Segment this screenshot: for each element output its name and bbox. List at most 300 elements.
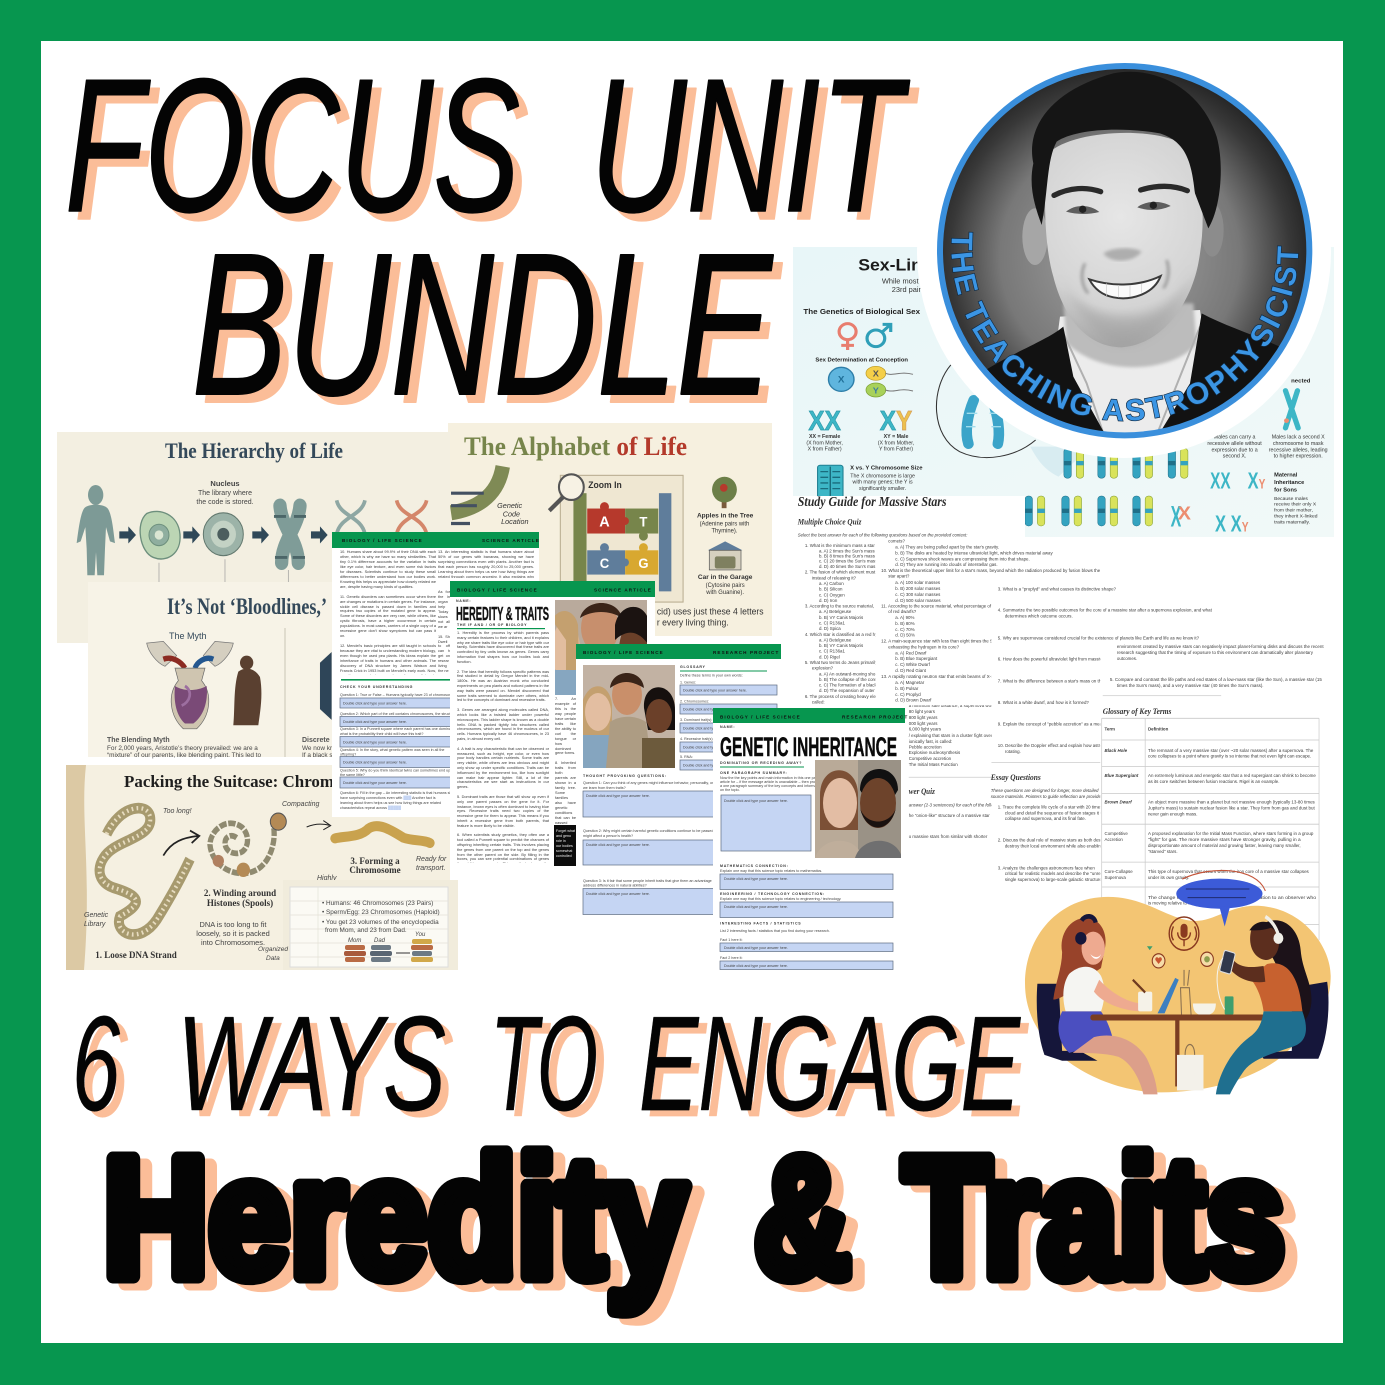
question 3: Question 3: In a Punnett square where each parent has one dominant [340, 727, 454, 731]
quiz column 2: 11. According to the source material, what percentage of stars [881, 603, 1002, 608]
male inheritance captions: Males can carry a [1214, 435, 1256, 441]
chairs [1037, 982, 1329, 1061]
question 2: Double click and type your answer here. [586, 843, 650, 847]
chromosome size note: with many genes; the Y is [853, 480, 913, 486]
step labels: 1. Loose DNA Strand [95, 950, 177, 960]
quiz column 3: These questions are designed for longer, more detailed [991, 788, 1099, 793]
glossary block: 5. RNA: [680, 755, 693, 759]
glossary table: This type of supernova that occurs when the iron core of a massive star collapses [1148, 869, 1309, 874]
interesting facts: INTERESTING FACTS / STATISTICS [720, 922, 801, 926]
male inheritance captions: recessive allele without [1207, 441, 1262, 447]
side column text: 7. An example of this is the way people have certain traits like the ability to curl the tongue or how dominant gene forms. [555, 697, 576, 755]
puzzle: A: A [599, 514, 610, 530]
step labels [95, 856, 401, 960]
fact list [322, 900, 440, 934]
glossary block: GLOSSARY [680, 665, 706, 669]
quiz column 2: d. D) 50% [895, 632, 915, 638]
quiz column 2 top: a. A) They are being pulled apart by the star's gravity. [895, 544, 999, 550]
engineering connection: Double click and type your answer here. [724, 905, 788, 909]
quiz column 1: explosion? [812, 666, 833, 671]
question 5: the same little? [340, 773, 365, 777]
topic: heredity and traits: Heredity [103, 1123, 687, 1313]
question 1: Question 1: True or False – Humans typically have 23 of chromosomes in each cell. [340, 693, 477, 697]
quiz column 2: d. D) Brown Dwarf [895, 698, 932, 703]
essay page upper text: research suggesting that the timing of exposure to this environment can dramatically alter planetary [1117, 650, 1314, 655]
quiz column 3: destroy their local environment while also enabling [1005, 843, 1104, 849]
glossary table: A proposed explanation for the Initial Mass Function, where stars forming in a group [1148, 831, 1314, 836]
discrete caption: Discrete I [302, 737, 334, 744]
XX female: XX [808, 406, 841, 437]
portrait badge [937, 63, 1312, 438]
glossary table: is moving relative to the source. [1148, 901, 1210, 906]
icon: book stacks [344, 939, 433, 962]
quiz column 1: instead of releasing it? [812, 575, 856, 580]
title shadow: focus unit: UNIT [599, 48, 919, 260]
glossary table: The change in wavelength of light or sound in relation to an observer who [1148, 895, 1317, 900]
question 3: Double click and type your answer here. [586, 892, 650, 896]
article columns: 11. Genetic disorders can sometimes occur when there are changes or mutations in certain genes. For instance, sickle cell disease is passed down in families and requires two copies of the mutated gene to appear. Some of these disorders are very rare, while others, like cystic fibrosis, have a higher occurrence in certain populations. In most cases, carriers of a single copy of a recessive gene don't show symptoms but can pass it on. [340, 595, 436, 638]
quiz column 3: 10. Describe the Doppler effect and explain how astronomers [998, 743, 1118, 748]
header labels [457, 588, 652, 592]
hierarchy title: The Hierarchy of Life [165, 438, 343, 463]
quiz column 1: d. D) The expansion of outer layers [819, 688, 888, 693]
quiz column 2: 13. A rapidly rotating neutron star that emits beams of X-rays [881, 674, 1000, 679]
quiz column 2 lower: Pebble accretion [909, 744, 942, 749]
icon: red DNA helix [397, 500, 427, 534]
question 2 [583, 829, 723, 865]
engineering connection: ENGINEERING / TECHNOLOGY CONNECTION: [720, 892, 825, 896]
topic shadow: heredity and traits [115, 1130, 1297, 1320]
quiz column 1: b. B) VY Canis Majoris [819, 643, 864, 648]
article right column cut-off [438, 590, 450, 680]
quiz column 2 lower: o massive stars from similar with shorter [909, 834, 988, 839]
callout: black box: role in [556, 839, 566, 843]
study guide title: Study Guide for Massive Stars [798, 494, 947, 509]
question 3: Double click and type your answer here. [343, 740, 407, 744]
question 3 [583, 879, 723, 914]
question 1: Double click and type your answer here. [343, 702, 407, 706]
glossary table: Jupiter's mass) to sustain nuclear fusion like a star. They form from gas and dust but [1148, 805, 1315, 811]
article text [457, 631, 549, 863]
glossary block: Define these terms in your own words: [680, 674, 743, 678]
header labels: BIOLOGY / LIFE SCIENCE [342, 538, 423, 543]
panel: packing the suitcase [66, 765, 458, 970]
genetic code label: Code [503, 509, 520, 518]
question 2: Question 2: Which part of the cell contains chromosomes, the structures? [340, 712, 460, 716]
subtitle shadow: 6 ways to engage: TO [498, 994, 606, 1145]
quiz column 1: 6. The process of creating heavy elements is [805, 694, 893, 699]
glossary table: Definition [1148, 726, 1168, 732]
photo: two students [815, 760, 902, 858]
glossary table: never gain enough mass. [1148, 811, 1197, 817]
poster title: Sex-Lin [858, 255, 922, 275]
glossary table: "fight" for gas. The more massive stars have stronger gravity, pulling in a [1148, 837, 1301, 842]
title: focus unit: UNIT [590, 40, 910, 252]
article right column cut-off: As for the in organ help Today slows not all we ar [438, 590, 450, 629]
quiz column 1: a. A) An outward-moving shockwave [819, 671, 890, 677]
interesting facts: List 2 interesting facts / statistics that you find during your research. [720, 929, 830, 933]
quiz column 1: a. A) Carbon [819, 581, 844, 586]
quiz column 1: called: [812, 699, 825, 705]
quiz column 1: c. C) R136a1 [819, 649, 845, 654]
quiz column 2: of red dwarfs? [888, 609, 917, 614]
myth caption: “mixture” of our parents, like blending paint. This led to [107, 752, 261, 759]
quiz column 3: 1. Trace the complete life cycle of a star with 20 times [998, 804, 1103, 809]
icon: garage [708, 541, 742, 570]
XY male: XY = Male [884, 434, 909, 440]
title shadow: focus unit: FOCUS [74, 48, 529, 260]
engineering connection: Explain one way that this science topic relates to engineering / technology. [720, 897, 841, 901]
XX female: X from Father) [808, 447, 842, 453]
interesting facts: Double click and type your answer here. [724, 946, 788, 950]
divider [284, 628, 286, 757]
question 5: Double click and type your answer here. [343, 781, 407, 785]
arrow [163, 831, 199, 856]
genetic code label: Location [501, 517, 528, 526]
subtitle shadow: 6 ways to engage: WAYS [185, 994, 454, 1145]
handwritten notes: Ready for [416, 856, 447, 863]
document: science article page [332, 532, 540, 817]
question 1: Question 1: Can you think of any genes might influence behavior, personality, or [583, 781, 714, 785]
portrait: shirt and neck [1058, 302, 1201, 432]
quiz column 2: a. A) Magnetar [895, 680, 925, 685]
question 6: Question 6: Fill in the gap – An interesting statistic is that humans share [340, 791, 457, 795]
myth caption: For 2,000 years, Aristotle’s theory prevailed: we are a [107, 745, 258, 752]
XY male: (X from Mother, [878, 440, 914, 446]
small X and x chromosomes: X [1178, 504, 1191, 524]
topic: heredity and traits [103, 1123, 1285, 1313]
question 3: what is the probability their child will have this trait? [340, 732, 423, 736]
portrait: face [1045, 133, 1203, 347]
thought provoking heading: THOUGHT PROVOKING QUESTIONS: [583, 774, 667, 778]
icon: magnifying glass [549, 474, 584, 511]
title: focus unit: FOCUS [65, 40, 520, 252]
name field: NAME: [720, 725, 735, 729]
document: genetic inheritance page [713, 708, 908, 972]
topic shadow: heredity and traits: Traits [915, 1130, 1297, 1320]
title: bundle: BUNDLE [192, 211, 774, 437]
subtitle: 6 ways to engage: TO [490, 988, 598, 1139]
organized data note: Organized [258, 946, 288, 953]
step labels: Histones (Spools) [207, 898, 273, 908]
icon: egg cell [829, 367, 854, 391]
alphabet title: The Alphabet of Life [464, 432, 687, 461]
callout: black box: Forget what [556, 829, 575, 833]
glossary table: Blue Supergiant [1105, 773, 1139, 778]
maternal inheritance [1210, 468, 1318, 536]
question 5: Question 5: Why do you think identical twins can sometimes end up looking [340, 768, 463, 772]
green header [713, 708, 905, 723]
question 3: address differences in natural abilities? [583, 884, 647, 888]
quiz column 2: 12. A main-sequence star with less than eight times the Sun's mass [881, 638, 1013, 644]
XX female: (X from Mother, [806, 440, 843, 446]
quiz column 2 lower: / explaining that stars in a cluster fight over [909, 733, 993, 738]
quiz column 3: collapse and supernova, and its final fate. [1005, 816, 1086, 821]
mom dad you [348, 932, 426, 944]
mom dad you: Mom [348, 938, 361, 944]
dark hexagon [320, 652, 332, 720]
quiz column 1: c. C) The formation of a black hole [819, 682, 887, 688]
the myth label: The Myth [169, 631, 207, 641]
essay page upper text: environment created by massive stars can negatively impact planet-forming disks and discuss the recent [1117, 644, 1324, 649]
apples caption: Thymine). [711, 528, 738, 534]
puzzle: A [587, 502, 625, 534]
green rule [720, 766, 804, 768]
organized data note [258, 946, 288, 962]
glossary table [1102, 718, 1319, 940]
quiz column 3: source materials. Pointers to guide reflection are provided [991, 794, 1104, 799]
quiz column 1: b. B) VY Canis Majoris [819, 615, 864, 620]
fact list: • You get 23 volumes of the encyclopedia [322, 919, 439, 926]
glossary block: Double click and type your answer here. [683, 746, 747, 750]
panel: the hierarchy of life [57, 432, 450, 643]
interesting facts [720, 922, 893, 970]
quiz column 3 top: 3. What is a "proplyd" and what causes its distinctive shape? [998, 586, 1116, 591]
quiz column 3 top [998, 586, 1212, 640]
math connection: Explain one way that this science topic relates to mathematics. [720, 869, 822, 873]
question 2: Double click and type your answer here. [343, 720, 407, 724]
glossary block: Double click and type your answer here. [683, 688, 747, 692]
quiz column 1: d. D) Iron [819, 598, 838, 603]
quiz column 2: b. B) 200 solar masses [895, 586, 941, 591]
handwritten notes: Highly [317, 875, 337, 882]
quiz column 2 lower: a minimum safe distance, a supernova would [909, 703, 997, 708]
quiz column 2: a. A) 90% [895, 615, 914, 620]
dna note: loosely, so it is packed [196, 929, 270, 938]
math connection: Double click and type your answer here. [724, 877, 788, 881]
quiz column 2 lower: Competitive accretion [909, 756, 951, 761]
panel: sex-linked inheritance poster [793, 247, 1334, 537]
interesting facts: Fact 2 here it: [720, 956, 743, 960]
bowl and cup [1193, 996, 1234, 1015]
portrait: eyebrows [1054, 186, 1187, 195]
header labels: BIOLOGY / LIFE SCIENCE [457, 588, 538, 592]
quiz column 2: a. A) 100 solar masses [895, 580, 941, 585]
yellow blob [1025, 897, 1331, 1092]
quiz column 2 lower: 800 light years [909, 715, 938, 720]
icon: smile bubble [1201, 952, 1213, 966]
maternal inheritance: XY [1248, 468, 1266, 493]
question 6: learning about them helps us see how living things are related [340, 801, 441, 805]
quiz column 2 lower: The Initial Mass Function [909, 762, 958, 767]
quiz column 3: Essay Questions [990, 773, 1041, 782]
quiz column 2 lower: 000 light years [909, 721, 938, 726]
portrait: nose shadow [1103, 248, 1142, 261]
callout: black box: somewhat [556, 849, 572, 853]
handwritten notes: Too long! [163, 808, 192, 815]
discrete caption: If a black s [302, 752, 333, 759]
glossary table: Accretion [1105, 837, 1123, 842]
question 6: characteristics repeat across █████ [340, 805, 401, 811]
interesting facts: Fact 1 here it: [720, 938, 743, 942]
large X chromosome [1284, 391, 1298, 428]
maternal inheritance: from their mother, [1274, 507, 1313, 513]
male inheritance captions: chromosome to mask [1273, 441, 1324, 447]
article text: 1. Heredity is the process by which parents pass many certain features to their children, and it explains why we share traits like eye color or hair type with our family. Scientists have discovered that these traits are controlled by tiny units known as genes. Genes carry information that shapes how our bodies look and function. [457, 631, 549, 664]
quiz column 2: c. C) 300 solar masses [895, 592, 941, 597]
mom dad you: You [415, 932, 426, 938]
quiz column 2 lower: 6,000 light years [909, 726, 942, 732]
white tote bag [1177, 1044, 1203, 1090]
portrait: eyes [1066, 202, 1171, 214]
quiz column 2 lower: 80 light years [909, 709, 936, 714]
green rule [341, 679, 451, 681]
article text: 3. Genes are arranged along molecules called DNA, which looks like a twisted ladder under powerful microscopes. This ladder shape is known as a double helix. DNA is packed tightly into structures called chromosomes, which are found in the nucleus of our cells. Humans typically have 46 chromosomes, in 23 pairs, in almost every cell. [457, 708, 549, 741]
summary block: on the topic. [720, 788, 740, 792]
article columns: 10. Humans share about 99.9% of their DNA with each other, which is why we have so many similarities. That tiny 0.1% difference accounts for the variation in traits like eye color, hair texture, and even some risk factors for diseases. Scientists continue to study these small differences to better understand how our bodies work. Knowing this helps us appreciate how closely related we are, despite having many kinds of qualities. [340, 550, 436, 589]
question 3: Question 3: Is it fair that some people inherit traits that give them an advantage [583, 879, 712, 883]
genetic code label [498, 502, 528, 524]
topic: heredity and traits: & [754, 1123, 851, 1313]
curved badge text: THE TEACHING ASTROPHYSICIST [950, 232, 1299, 422]
male inheritance captions: nected [1291, 379, 1311, 385]
icon: Aristotle figure [233, 656, 261, 725]
glossary block: 4. Recessive trait(s): [680, 737, 714, 741]
icon: sperm cells: Y [873, 386, 879, 395]
header labels [342, 538, 540, 543]
question 1 [340, 693, 477, 708]
portrait: smile [1089, 276, 1161, 298]
quiz column 1: d. D) Spica [819, 626, 841, 631]
XX female: XX = Female [809, 434, 840, 440]
essay page upper text: outcomes. [1117, 656, 1137, 661]
apples caption: Apples in the Tree [697, 512, 754, 519]
quiz column 1 [805, 544, 876, 704]
quiz column 2: c. C) Proplyd [895, 692, 921, 697]
handwritten notes: transport. [416, 865, 446, 872]
quiz column 3: 6. How does the powerful ultraviolet light from massive stars [998, 656, 1116, 662]
step labels: 3. Forming a [350, 856, 400, 866]
question 5 [340, 768, 463, 788]
quiz column 2 top: comets? [888, 538, 905, 544]
icon: mars symbol [867, 324, 891, 347]
question 1 [583, 781, 723, 817]
speech bubble [1176, 870, 1265, 926]
quiz directions: Select the best answer for each of the following questions based on the provided context: [798, 532, 968, 538]
quiz column 3 top: 4. Summarize the two possible outcomes for the core of a massive star after a supernova explosion, and what [998, 607, 1212, 613]
torn paper edge [66, 765, 87, 970]
engineering connection [720, 892, 893, 918]
discrete caption: We now kr [302, 745, 333, 752]
puzzle: C: C [600, 556, 610, 571]
name field: NAME: [456, 599, 471, 603]
glossary table: disproportionate amount of material and growing faster, leaving many smaller, [1148, 843, 1301, 848]
maternal inheritance: XX [1210, 468, 1231, 493]
subtitle: 6 ways to engage [72, 988, 1021, 1139]
question 1: Double click and type your answer here. [586, 794, 650, 798]
quiz column 3 top: determines which outcome occurs. [1005, 613, 1073, 619]
project subtitle: DOMINATING OR RECEDING AWAY? [720, 761, 802, 765]
male inheritance captions [1207, 379, 1328, 459]
question 2: might affect a person's health? [583, 834, 633, 838]
glossary block: Double click and type your answer here. [683, 764, 747, 768]
portrait: jacket [987, 314, 1279, 432]
summary block: article for – if the message article is unavailable – then provide [720, 780, 822, 784]
quiz column 2 top: star apart? [888, 573, 910, 579]
glossary table: Term [1105, 726, 1115, 732]
nucleus caption: Nucleus [210, 479, 240, 488]
male inheritance captions: to higher expression. [1274, 453, 1323, 459]
glossary table: An object more massive than a planet but not massive enough (typically 13-80 times [1148, 799, 1315, 805]
title shadow: bundle: BUNDLE [201, 219, 783, 445]
math connection [720, 864, 893, 890]
nucleus caption: The library where [198, 490, 252, 497]
zoom frame [560, 475, 683, 602]
essay page upper text [1103, 644, 1324, 696]
quiz column 2 lower: wer Quiz [909, 787, 935, 796]
glossary table: under its own gravity. [1148, 875, 1189, 880]
quiz column 2 top [881, 538, 1101, 579]
male inheritance captions: Males lack a second X [1272, 435, 1325, 441]
apples caption [697, 512, 754, 534]
subtitle shadow: 6 ways to engage [80, 994, 1029, 1145]
quiz column 2 top: 10. What is the theoretical upper limit for a star's mass, beyond which the radiation produced by fusion blows the [881, 568, 1101, 573]
topic: heredity and traits: Traits [903, 1123, 1285, 1313]
callout: black box: controlled [556, 854, 572, 858]
icon: human figure [77, 485, 115, 575]
right student [1216, 917, 1311, 1094]
glossary table: The remnant of a very massive star (over ~20 solar masses) after a supernova. The [1148, 748, 1314, 753]
glossary block [680, 665, 777, 770]
XX female [806, 406, 843, 453]
puzzle: T [621, 509, 658, 541]
callout: black box [554, 825, 576, 866]
chromosome size note: significantly smaller. [859, 486, 906, 492]
portrait: hair [1032, 72, 1221, 228]
portrait: cheek creases [1082, 260, 1168, 293]
quiz column 2: c. C) 70% [895, 627, 915, 632]
quiz column 1: b. B) The collapse of the core [819, 677, 877, 682]
icon: egg cell: X [838, 375, 845, 386]
glossary table: Brown Dwarf [1105, 799, 1132, 805]
maternal inheritance: Because males [1274, 496, 1309, 502]
glossary table: Black Hole [1105, 748, 1127, 753]
icon: pouring jugs [147, 641, 233, 668]
quiz column 3: 8. What is a white dwarf, and how is it formed? [998, 700, 1089, 705]
quiz column 3: critical for realistic models and describe the "unresolved [1005, 871, 1114, 876]
garage caption: (Cytosine pairs [706, 583, 745, 589]
icon: sperm cells [866, 366, 913, 397]
organized data note: Data [266, 955, 280, 962]
glossary table: as its core switches between fusion reactions. Rigel is an example. [1148, 779, 1279, 784]
quiz column 2 lower: answer (2-3 sentences) for each of the following [909, 802, 1003, 807]
header labels: BIOLOGY / LIFE SCIENCE [583, 650, 664, 655]
quiz column 2 top: b. B) The disks are heated by intense ultraviolet light, which drives material away [895, 550, 1053, 555]
loose DNA strand [100, 808, 190, 935]
maternal inheritance: Maternal [1274, 473, 1298, 479]
section heading: The Genetics of Biological Sex [803, 307, 921, 316]
question 6 [340, 791, 457, 811]
maternal inheritance: receive their only X [1274, 502, 1317, 508]
header labels [583, 650, 779, 655]
mom dad you: Dad [374, 938, 386, 944]
garage caption: Car in the Garage [698, 574, 753, 581]
fact list: from Mom, and 23 from Dad. [325, 927, 407, 934]
glossary table: core collapses to a point where gravity is so intense that not even light can escape. [1148, 753, 1311, 758]
quiz column 1: a. A) 2 times the Sun's mass [819, 548, 875, 553]
glossary table: Competitive [1105, 831, 1128, 836]
quiz column 2 [881, 580, 992, 702]
subtitle: 6 ways to engage: 6 [72, 988, 121, 1139]
topic shadow: heredity and traits: Heredity [115, 1130, 699, 1320]
article text: 2. The idea that heredity follows specific patterns was first studied in detail by Gregor Mendel in the mid-1800s. He was an Austrian monk who conducted experiments on pea plants and noticed patterns in the way traits were passed on. Mendel discovered that some traits seemed to dominate over others, which led to the concepts of dominant and recessive traits. [457, 670, 549, 702]
question 4: Double click and type your answer here. [343, 760, 407, 764]
quiz column 2 top: d. D) They are running into clouds of interstellar gas. [895, 562, 998, 567]
subtitle shadow: 6 ways to engage: ENGAGE [647, 994, 1029, 1145]
summary block: a one paragraph summary of the key concepts and information [720, 784, 822, 788]
question 4 [340, 748, 455, 768]
chromosome size note: The X chromosome is large [850, 473, 915, 479]
